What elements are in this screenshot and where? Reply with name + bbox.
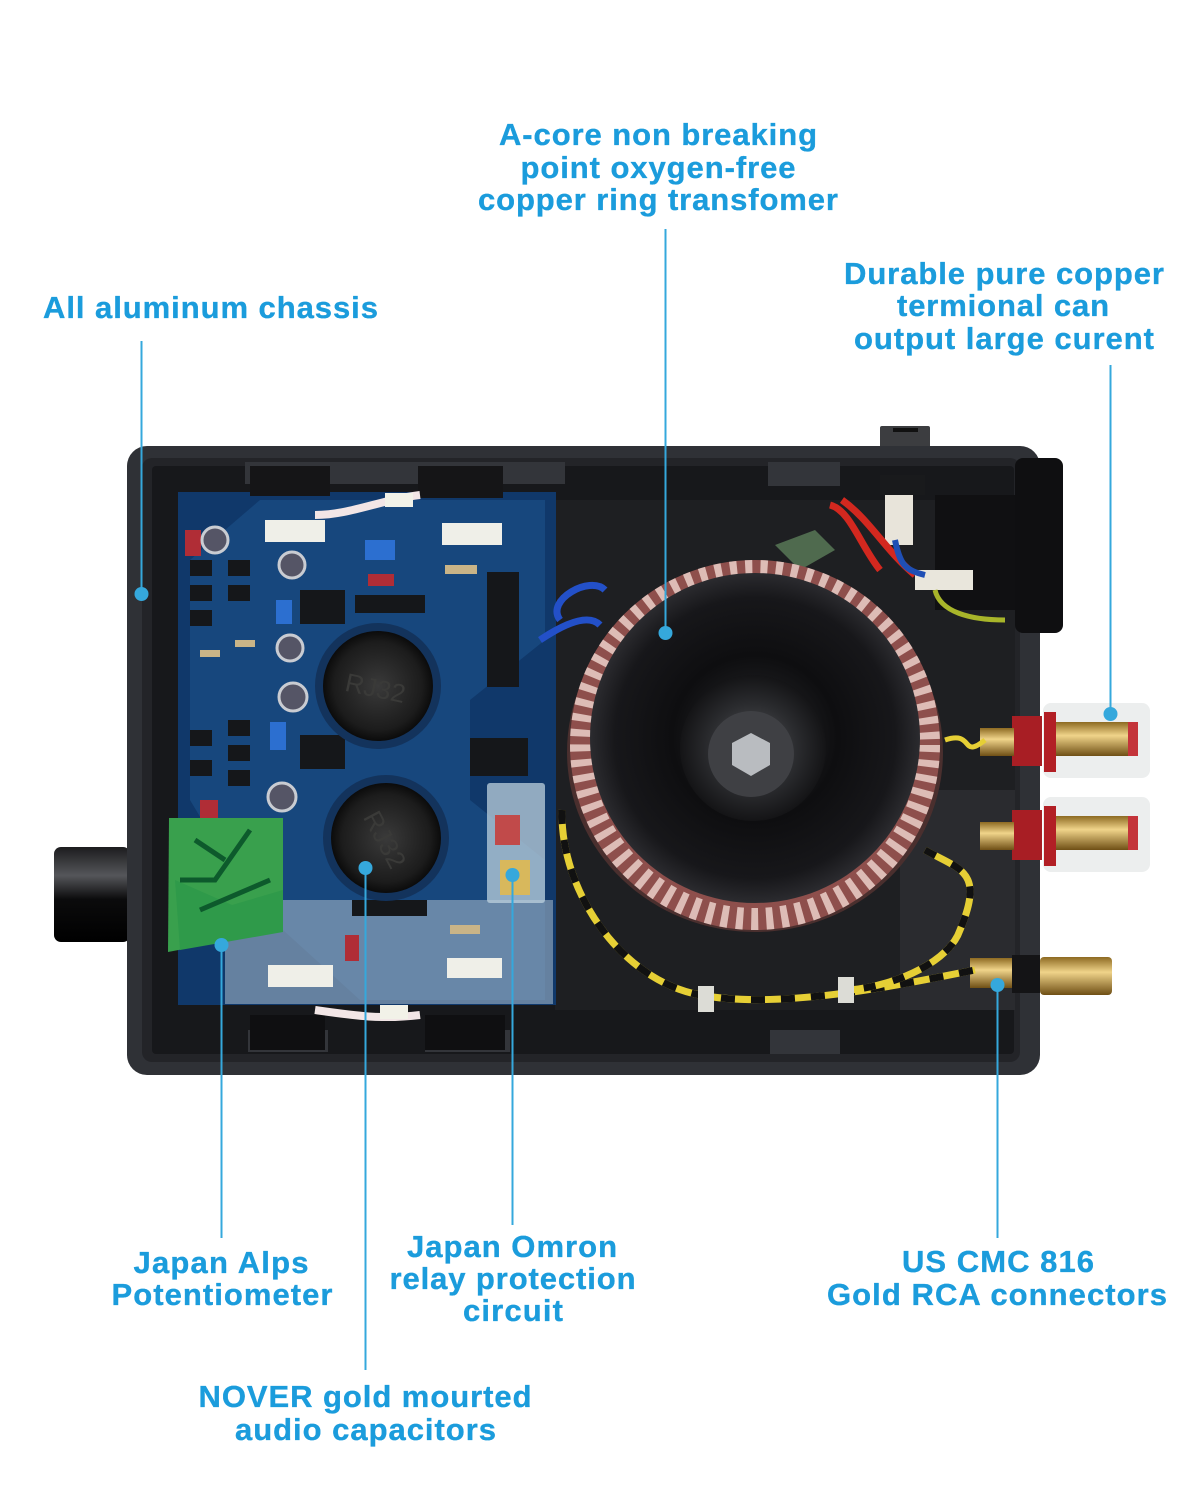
label: chassis: All aluminum chassis [43,290,378,325]
floor [555,500,1015,1010]
label: capacitors [198,1379,532,1447]
power capacitors [315,623,449,901]
power switch [880,426,930,450]
transformer [540,560,943,932]
alps potentiometer board [168,818,283,952]
label: potentiometer [112,1245,332,1312]
small capacitors and resistors [185,530,394,961]
pointer: potentiometer [214,938,228,1238]
pointer: rca [990,978,1004,1238]
twisted wires [562,738,985,1012]
label: potentiometer: Japan Alps [134,1245,308,1280]
circuit board [168,466,556,1050]
pointer: relay [506,868,520,1225]
label: transformer: copper ring transfomer [478,182,838,217]
label: rca: Gold RCA connectors [827,1277,1167,1312]
relay [487,783,545,903]
label: capacitors: NOVER gold mourted [198,1379,532,1414]
label: rca [827,1244,1167,1312]
label: rca: US CMC 816 [902,1244,1094,1279]
product photo: amplifier [54,426,1150,1075]
label: terminals: termional can [897,288,1109,323]
label: terminals: Durable pure copper [844,256,1164,291]
heat sink clips and white blocks [250,466,330,496]
rca connectors [970,955,1112,995]
label: relay: circuit [463,1293,563,1328]
chassis [127,446,1040,1075]
power capacitors: RJ32 [357,806,412,873]
label: relay [390,1229,636,1328]
label: terminals [844,256,1164,356]
pointer: chassis [134,341,148,601]
top slots [245,462,840,1054]
volume knob [54,847,130,942]
label: potentiometer: Potentiometer [112,1277,332,1312]
label: terminals: output large curent [854,321,1154,356]
pointer: terminals [1104,365,1118,721]
label: relay: Japan Omron [407,1229,617,1264]
small transistors [190,560,528,916]
bolt [732,733,770,776]
label: relay: relay protection [390,1261,636,1296]
pointer: capacitors [358,861,372,1370]
IEC socket [775,458,1063,633]
pointer: transformer [658,229,672,640]
label: transformer: point oxygen-free [520,150,796,185]
label: capacitors: audio capacitors [235,1412,496,1447]
label: transformer [478,117,838,217]
speaker terminals [980,703,1150,872]
label: transformer: A-core non breaking [499,117,817,152]
power capacitors: RJ32 [343,667,408,709]
